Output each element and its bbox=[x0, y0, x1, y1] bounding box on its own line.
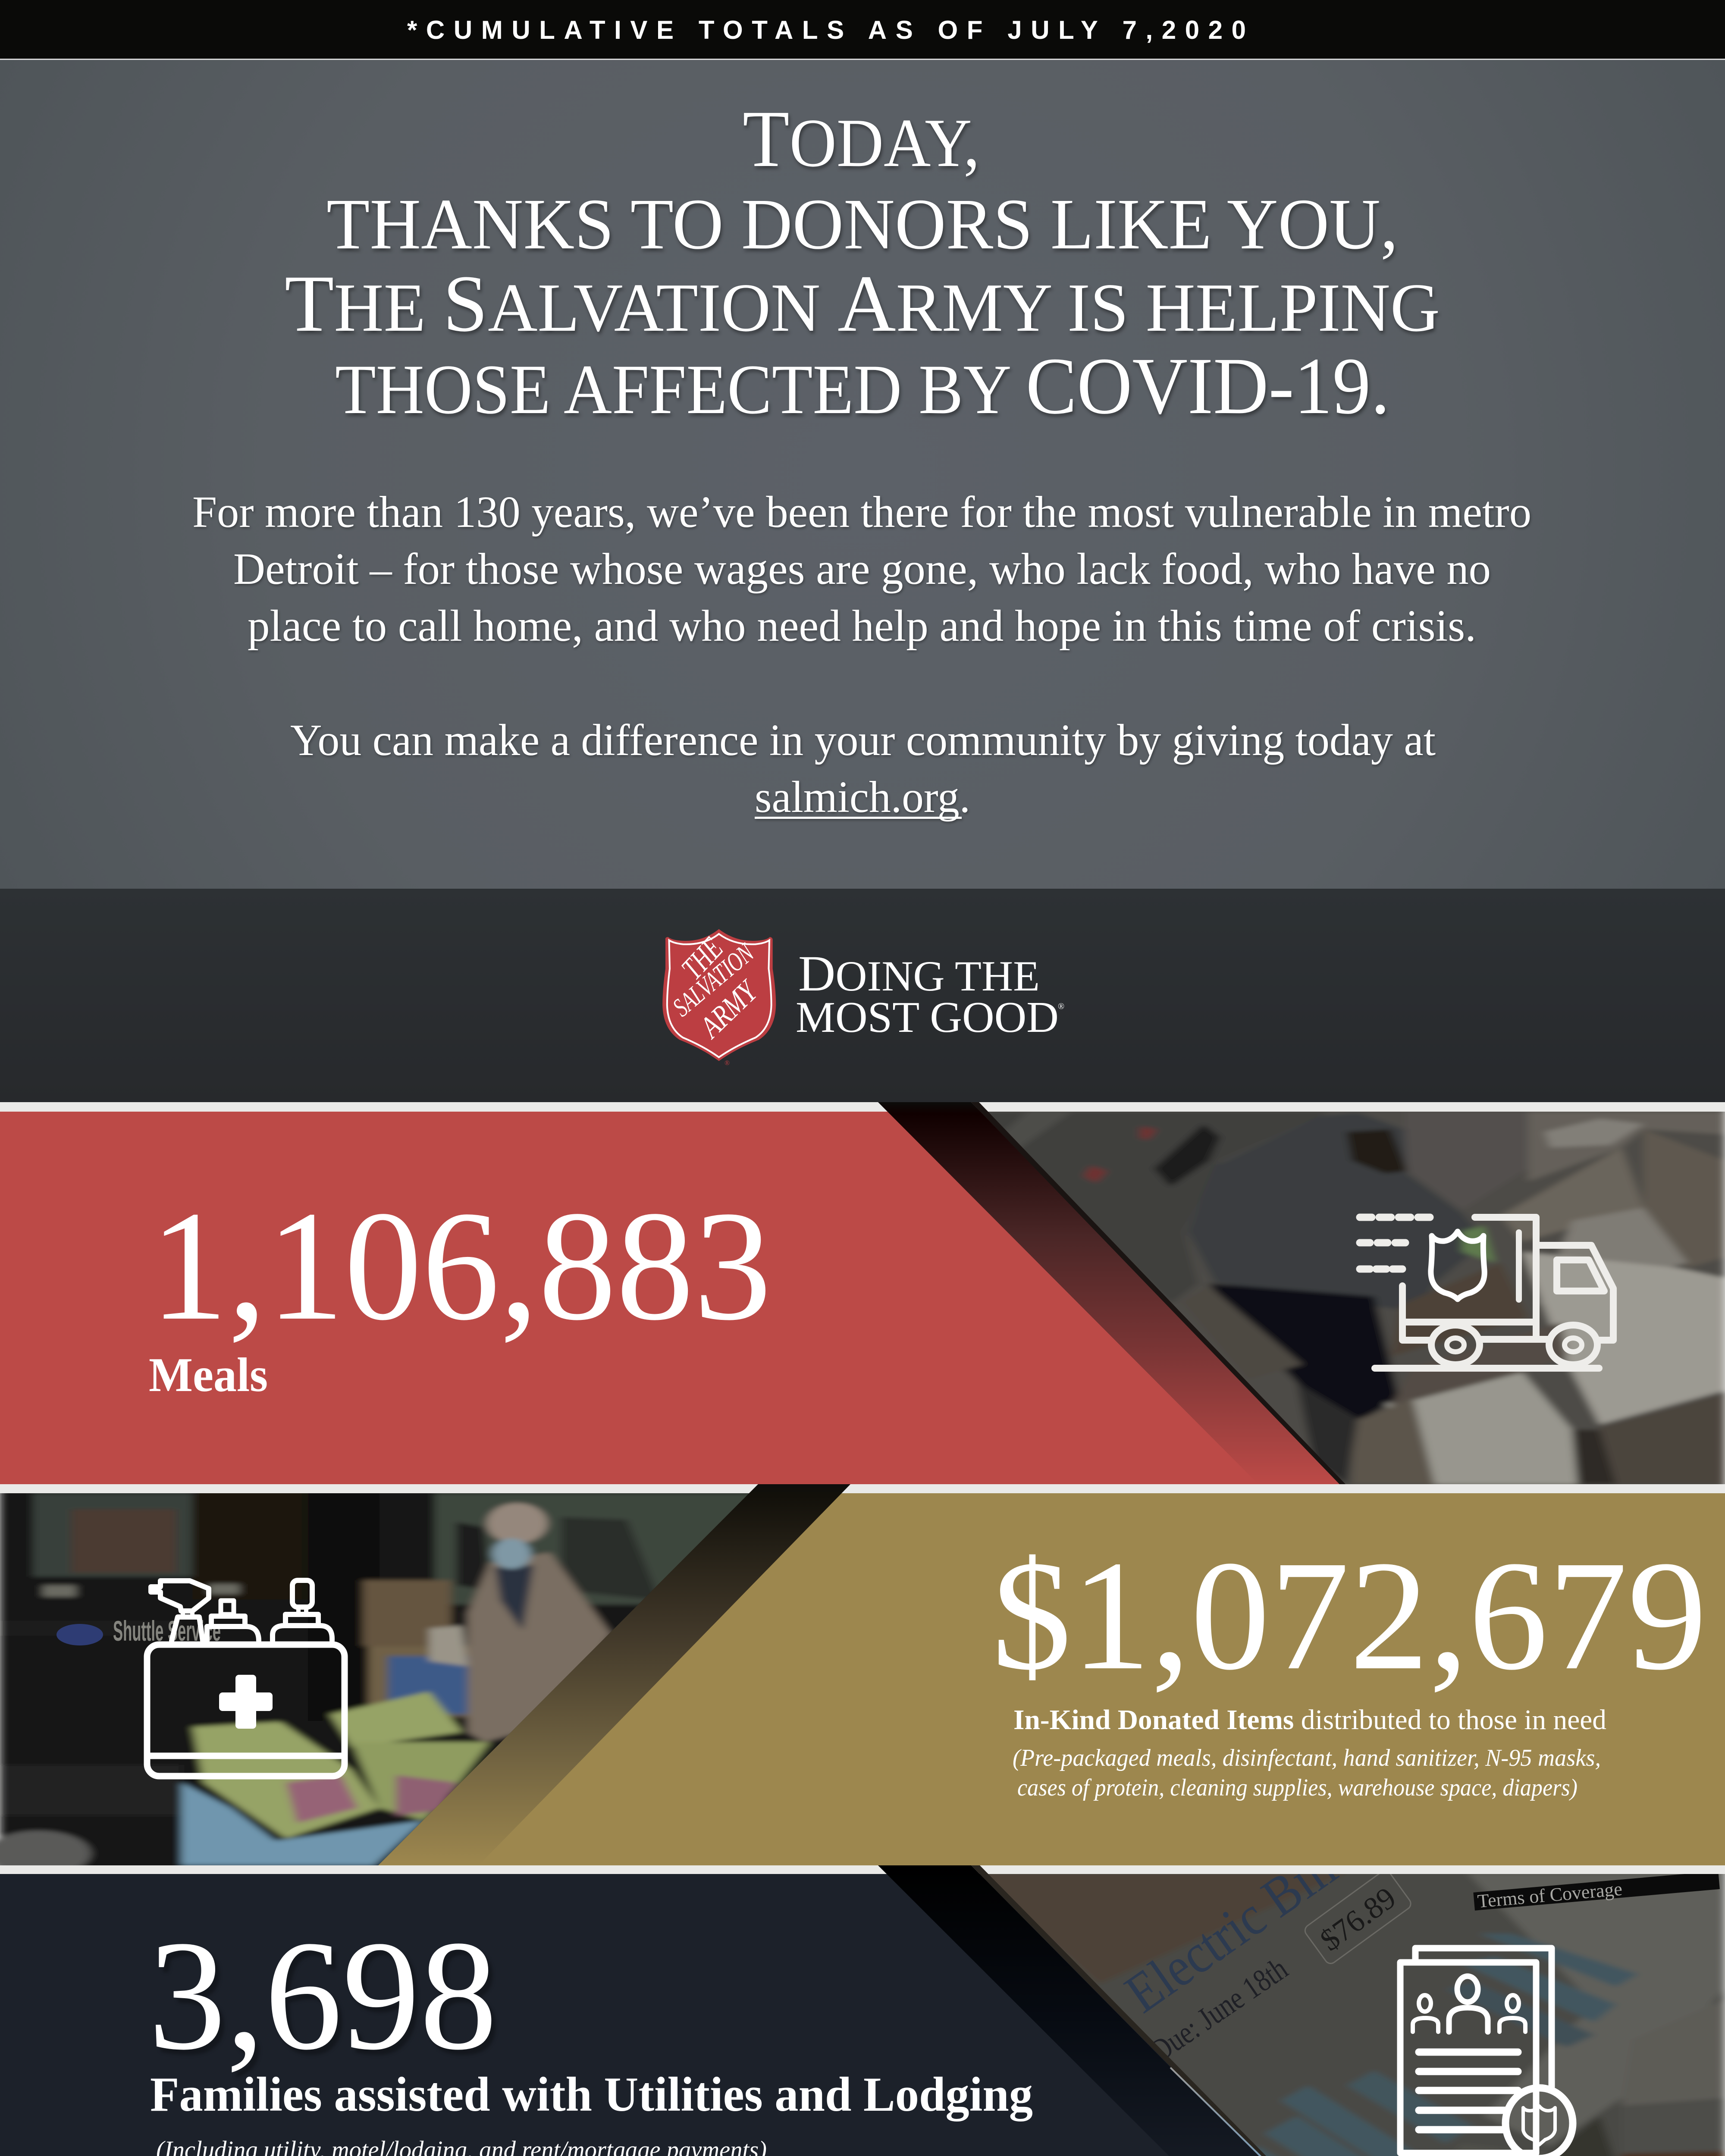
icon: salvation army shield bbox=[662, 929, 776, 1067]
text: doing the most good slogan: ® bbox=[1058, 1002, 1064, 1011]
icon: documents with family and shield bbox=[1400, 1948, 1573, 2156]
panel: families stat bbox=[0, 1865, 1354, 2156]
label: terms of coverage header strip: Terms of Coverage bbox=[1477, 1878, 1623, 1912]
icon: salvation army shield: ARMY bbox=[692, 973, 765, 1045]
note: items list: (Pre-packaged meals, disinfectant, hand sanitizer, N-95 masks, bbox=[1013, 1745, 1601, 1771]
label: shuttle service lettering: Shuttle Service bbox=[113, 1615, 221, 1647]
label: due date: Due: June 18th bbox=[1144, 1951, 1294, 2069]
heading: today thanks to donors bbox=[285, 94, 1440, 431]
text: doing the most good slogan bbox=[796, 945, 1064, 1042]
number: families: 3,698 bbox=[148, 1908, 497, 2082]
label: in-kind donated items: In-Kind Donated Items distributed to those in need bbox=[1013, 1704, 1606, 1736]
text: doing the most good slogan: MOST GOOD bbox=[796, 993, 1059, 1042]
label: amount box bbox=[1303, 1868, 1413, 1966]
text block: intro paragraph: place to call home, and who need help and hope in this time of crisis. bbox=[248, 601, 1476, 651]
text block: call to action: You can make a difference in your community by giving today at bbox=[290, 715, 1436, 765]
panel: cumulative totals top bar: *CUMULATIVE TOTALS AS OF JULY 7,2020 bbox=[407, 16, 1246, 44]
photo: worker packing boxes bbox=[988, 1112, 1725, 1484]
panel: cumulative totals top bar bbox=[0, 0, 1725, 60]
panel: logo band bbox=[0, 889, 1725, 1102]
heading: today thanks to donors: THE SALVATION ARMY IS HELPING bbox=[285, 258, 1440, 348]
note: items list: cases of protein, cleaning supplies, warehouse space, diapers) bbox=[1017, 1774, 1578, 1801]
icon: salvation army shield: THE bbox=[674, 931, 730, 987]
icon: ford oval bbox=[56, 1624, 103, 1645]
text block: intro paragraph: For more than 130 years, we’ve been there for the most vulnerable in metro bbox=[192, 487, 1531, 537]
note: items list bbox=[1013, 1745, 1601, 1801]
photo: volunteer with donated supplies bbox=[0, 1493, 749, 1865]
icon: salvation army shield: ® bbox=[724, 1059, 730, 1067]
panel: intro header bbox=[0, 60, 1725, 889]
panel: in-kind items stat bbox=[378, 1484, 1725, 1865]
text block: call to action bbox=[290, 715, 1436, 822]
label: terms of coverage header strip bbox=[1473, 1874, 1720, 1911]
text: doing the most good slogan: DOING THE bbox=[798, 945, 1040, 1002]
icon: salvation army shield: SALVATION bbox=[667, 937, 760, 1022]
text block: intro paragraph bbox=[192, 487, 1531, 651]
number: in-kind dollars: $1,072,679 bbox=[992, 1528, 1707, 1702]
text block: intro paragraph: Detroit – for those whose wages are gone, who lack food, who have no bbox=[233, 544, 1491, 594]
heading: today thanks to donors: THANKS TO DONORS LIKE YOU, bbox=[326, 184, 1398, 264]
icon: sanitizer kit bbox=[147, 1580, 345, 1776]
label: families assisted: Families assisted with Utilities and Lodging bbox=[150, 2068, 1033, 2122]
text block: call to action: salmich.org. bbox=[755, 772, 970, 822]
label: electric bill title: Electric Bill bbox=[1114, 1836, 1348, 2025]
number: meals total: 1,106,883 bbox=[150, 1178, 772, 1353]
label: meals: Meals bbox=[149, 1348, 268, 1402]
photo: electric bill documents bbox=[988, 1874, 1725, 2156]
heading: today thanks to donors: THOSE AFFECTED BY COVID-19. bbox=[335, 341, 1390, 431]
panel: meals stat bbox=[0, 1102, 1346, 1484]
heading: today thanks to donors: TODAY, bbox=[743, 94, 980, 184]
icon: delivery truck bbox=[1360, 1217, 1613, 1368]
label: amount box: $76.89 bbox=[1314, 1880, 1402, 1958]
